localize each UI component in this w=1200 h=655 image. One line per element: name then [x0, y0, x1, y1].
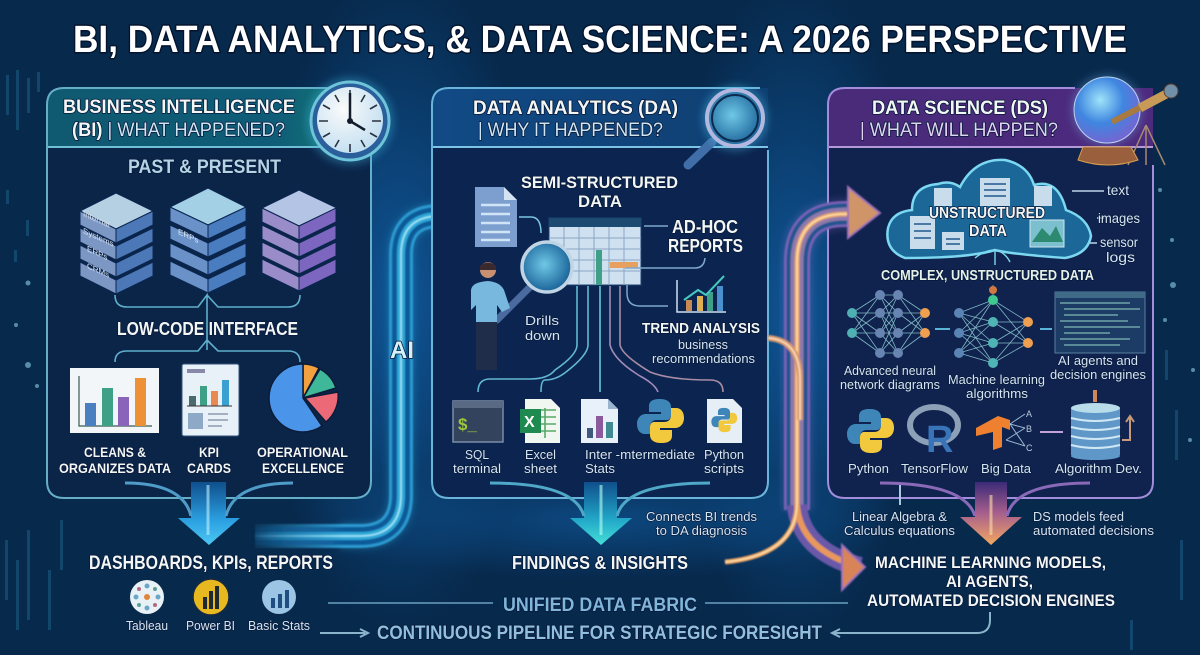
labels: DS tools: Python — [848, 461, 889, 476]
label: unstructured data: DATA — [969, 223, 1007, 240]
label: drills down: down — [525, 328, 560, 343]
icon: trend chart — [677, 276, 726, 312]
icon: Excel sheet: X — [524, 414, 535, 431]
label: low-code interface: LOW-CODE INTERFACE — [117, 319, 298, 339]
labels: BI outputs: CARDS — [187, 460, 231, 476]
labels: DS tools — [848, 461, 1142, 476]
labels: BI tools — [126, 618, 310, 633]
icon: unstructured data cloud — [887, 160, 1104, 265]
labels: DA tools: Python — [704, 447, 744, 462]
icon: analyst figure — [471, 262, 510, 370]
subheading: semi-structured data: SEMI-STRUCTURED — [521, 173, 678, 192]
labels: DA tools — [453, 447, 745, 476]
icon: SQL terminal: $_ — [458, 415, 477, 434]
heading: BI — [63, 97, 295, 141]
note: connects BI trends: Connects BI trends — [646, 509, 757, 524]
icon: magnifying glass — [688, 85, 768, 165]
icon: document — [475, 187, 517, 247]
icon: data source stack 1: Internal — [83, 208, 110, 230]
heading: DA — [473, 98, 678, 141]
icon: data source stack 2: ERPs — [178, 226, 198, 245]
arrow: BI down to dashboards — [125, 482, 293, 545]
heading: DA: DATA ANALYTICS (DA) — [473, 98, 678, 119]
subheading: semi-structured data: DATA — [578, 192, 622, 211]
icon: data source stack 1: CRMs — [87, 260, 109, 280]
labels: DA tools: sheet — [524, 461, 557, 476]
label: trend analysis: TREND ANALYSIS — [642, 320, 760, 337]
label: drills down: Drills — [525, 313, 560, 328]
icon: Basic Stats — [262, 580, 296, 614]
icon: KPI card — [182, 364, 239, 436]
label: drills down — [525, 313, 560, 343]
labels: data types: text — [1107, 182, 1129, 198]
icon: data source stack 1: ERPs — [87, 243, 107, 262]
labels: data types: logs — [1106, 249, 1135, 265]
icon: data source stack 1 — [80, 193, 153, 294]
panel: data science — [828, 88, 1153, 498]
heading: machine learning models: MACHINE LEARNING MODELS, — [875, 553, 1106, 572]
icon: code panel — [1055, 292, 1145, 353]
icon: TensorFlow tree — [976, 409, 1033, 453]
heading: machine learning models — [867, 553, 1115, 610]
labels: BI tools: Power BI — [186, 618, 235, 633]
note: connects BI trends — [646, 509, 757, 538]
icon: data source stack 1: Systems — [83, 225, 114, 249]
label: trend analysis: recommendations — [652, 351, 755, 366]
heading: machine learning models: AI AGENTS, — [946, 572, 1033, 591]
labels: data types: sensor — [1100, 234, 1138, 250]
icon: Tableau — [130, 580, 164, 614]
icon: intermediate stats document — [581, 399, 618, 443]
icon: spreadsheet — [549, 218, 641, 285]
panel: data analytics — [432, 88, 768, 498]
icon: TensorFlow tree: A — [1026, 409, 1032, 419]
icon: clock — [306, 77, 394, 165]
label: unstructured data: UNSTRUCTURED — [929, 205, 1045, 222]
note: linear algebra — [844, 509, 955, 538]
note: linear algebra: Linear Algebra & — [852, 509, 947, 524]
labels: DS tools: TensorFlow — [901, 461, 969, 476]
note: DS models feed: automated decisions — [1033, 523, 1154, 538]
icon: Python logo — [637, 399, 684, 443]
diagram: machine learning network — [954, 285, 1033, 368]
icon: TensorFlow tree: B — [1026, 424, 1032, 434]
icon: data source stack 3 — [262, 190, 337, 291]
labels: network captions: algorithms — [966, 386, 1029, 401]
icon: R logo — [910, 407, 958, 461]
labels: DS tools: Big Data — [981, 461, 1032, 476]
arrow: DS down to models — [880, 482, 1090, 545]
subheading: past and present: PAST & PRESENT — [128, 157, 281, 178]
labels: BI outputs: EXCELLENCE — [262, 460, 344, 476]
arrow: insight pipeline from DA to DS — [725, 187, 880, 590]
labels: DA tools: scripts — [704, 461, 745, 476]
chart: pie — [269, 364, 338, 432]
labels: DA tools: Inter -mtermediate — [585, 447, 695, 462]
labels: BI outputs: KPI — [199, 444, 219, 460]
heading: BI: BUSINESS INTELLIGENCE — [63, 97, 295, 118]
labels: data types — [1098, 182, 1140, 265]
heading: DA: | WHY IT HAPPENED? — [478, 120, 663, 141]
labels: data types: images — [1098, 210, 1140, 226]
icon: TensorFlow tree: C — [1026, 443, 1033, 453]
note: connects BI trends: to DA diagnosis — [656, 523, 747, 538]
labels: DS tools: Algorithm Dev. — [1055, 461, 1142, 476]
heading: DS: | WHAT WILL HAPPEN? — [860, 120, 1058, 141]
labels: DA tools: Stats — [585, 461, 616, 476]
diagram: neural network — [847, 290, 930, 358]
footer: continuous pipeline: CONTINUOUS PIPELINE FOR STRATEGIC FORESIGHT — [377, 623, 822, 644]
labels: DA tools: Excel — [525, 447, 556, 462]
labels: network captions: network diagrams — [840, 377, 940, 392]
subheading: semi-structured data — [521, 173, 678, 211]
title: BI, DATA ANALYTICS, & DATA SCIENCE: A 2026 PERSPECTIVE — [73, 19, 1127, 61]
labels: BI tools: Tableau — [126, 618, 168, 633]
labels: network captions — [840, 353, 1146, 401]
label: ad-hoc reports: AD-HOC — [672, 217, 738, 237]
labels: network captions: Advanced neural — [844, 363, 936, 378]
subheading: complex unstructured data: COMPLEX, UNSTRUCTURED DATA — [881, 267, 1094, 284]
label: AI: AI — [390, 337, 414, 364]
label: trend analysis — [642, 320, 760, 366]
icon: database — [1071, 390, 1134, 460]
labels: BI outputs — [59, 444, 348, 476]
labels: BI outputs: CLEANS & — [84, 444, 146, 460]
note: linear algebra: Calculus equations — [844, 523, 955, 538]
icon: data source stack 2 — [170, 188, 246, 293]
heading: machine learning models: AUTOMATED DECISION ENGINES — [867, 591, 1115, 610]
arrow: DA down to findings — [490, 482, 710, 545]
heading: BI: (BI) | WHAT HAPPENED? — [72, 120, 285, 141]
label: trend analysis: business — [678, 337, 728, 352]
heading: DS — [860, 98, 1058, 141]
icon: SQL terminal — [453, 401, 503, 442]
icon: Python script — [707, 399, 742, 443]
icon: big magnifier — [497, 242, 572, 320]
labels: network captions: Machine learning — [948, 372, 1045, 387]
labels: DA tools: SQL — [465, 447, 489, 462]
note: DS models feed — [1033, 509, 1154, 538]
footer: continuous pipeline — [320, 612, 990, 644]
heading: findings and insights: FINDINGS & INSIGHTS — [512, 553, 688, 573]
icon: bar chart card — [70, 368, 159, 433]
note: DS models feed: DS models feed — [1033, 509, 1124, 524]
label: unstructured data — [929, 205, 1045, 240]
connectors to DA tools — [478, 286, 723, 392]
label: ad-hoc reports: REPORTS — [668, 236, 743, 256]
heading: DS: DATA SCIENCE (DS) — [872, 98, 1048, 119]
heading: dashboards, KPIs, reports: DASHBOARDS, KPIs, REPORTS — [89, 553, 333, 574]
labels: BI outputs: ORGANIZES DATA — [59, 460, 171, 476]
icon: crystal ball and telescope — [1071, 74, 1178, 165]
arrow: AI pipeline from BI to DA — [255, 193, 470, 536]
panel: business intelligence — [47, 88, 371, 498]
footer: unified data fabric: UNIFIED DATA FABRIC — [503, 595, 697, 616]
labels: BI outputs: OPERATIONAL — [257, 444, 348, 460]
icon: R logo: R — [926, 419, 953, 461]
icon: Python — [847, 409, 894, 453]
labels: network captions: decision engines — [1050, 367, 1146, 382]
label: ad-hoc reports — [668, 217, 743, 256]
icon: Power BI — [193, 579, 229, 615]
icon: Excel sheet — [520, 399, 560, 443]
labels: network captions: AI agents and — [1058, 353, 1138, 368]
labels: DA tools: terminal — [453, 461, 501, 476]
labels: BI tools: Basic Stats — [248, 618, 310, 633]
